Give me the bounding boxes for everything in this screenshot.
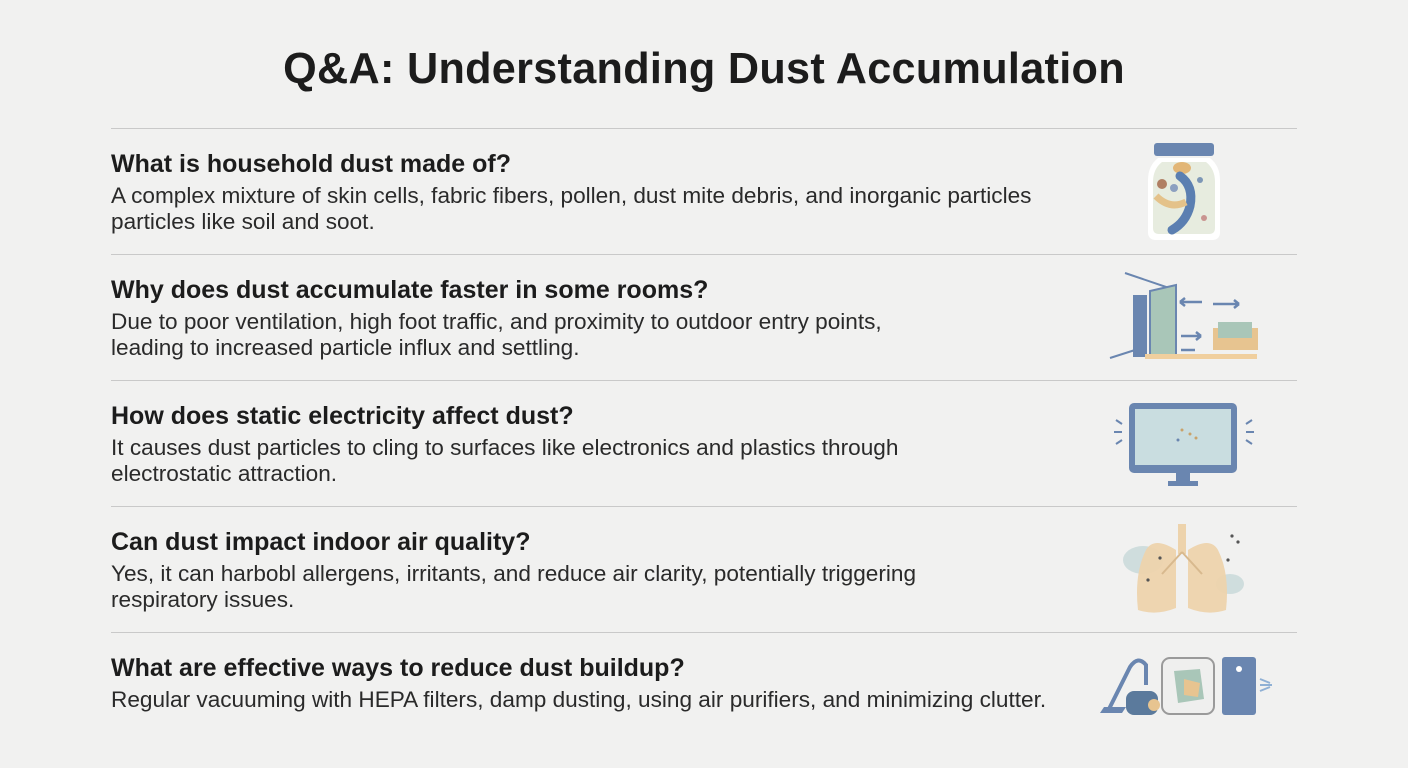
icon: lungs <box>1123 524 1244 613</box>
question 5 <box>111 654 1046 712</box>
question 4: Yes, it can harbobl allergens, irritants, and reduce air clarity, potentially triggering <box>111 561 916 586</box>
title: Q&A: Understanding Dust Accumulation <box>283 45 1125 93</box>
icon: door and room airflow <box>1110 272 1258 359</box>
question 4 <box>111 528 916 612</box>
question 3: It causes dust particles to cling to surfaces like electronics and plastics through <box>111 435 898 460</box>
question 2: Why does dust accumulate faster in some rooms? <box>111 276 708 304</box>
question 5: Regular vacuuming with HEPA filters, damp dusting, using air purifiers, and minimizing clutter. <box>111 687 1046 712</box>
question 2: Due to poor ventilation, high foot traffic, and proximity to outdoor entry points, <box>111 309 882 334</box>
icon: cleaning tools <box>1100 657 1272 715</box>
icon: dust jar <box>1148 143 1220 240</box>
question 5: What are effective ways to reduce dust buildup? <box>111 654 685 682</box>
question 2: leading to increased particle influx and settling. <box>111 335 579 360</box>
icon: monitor with static <box>1114 403 1254 486</box>
question 3: electrostatic attraction. <box>111 461 337 486</box>
question 3: How does static electricity affect dust? <box>111 402 574 430</box>
question 4: Can dust impact indoor air quality? <box>111 528 530 556</box>
question 3 <box>111 402 898 486</box>
question 1: A complex mixture of skin cells, fabric fibers, pollen, dust mite debris, and inorganic particles <box>111 183 1031 208</box>
question 1 <box>111 150 1031 234</box>
question 2 <box>111 276 882 360</box>
question 1: particles like soil and soot. <box>111 209 375 234</box>
question 4: respiratory issues. <box>111 587 294 612</box>
question 1: What is household dust made of? <box>111 150 511 178</box>
